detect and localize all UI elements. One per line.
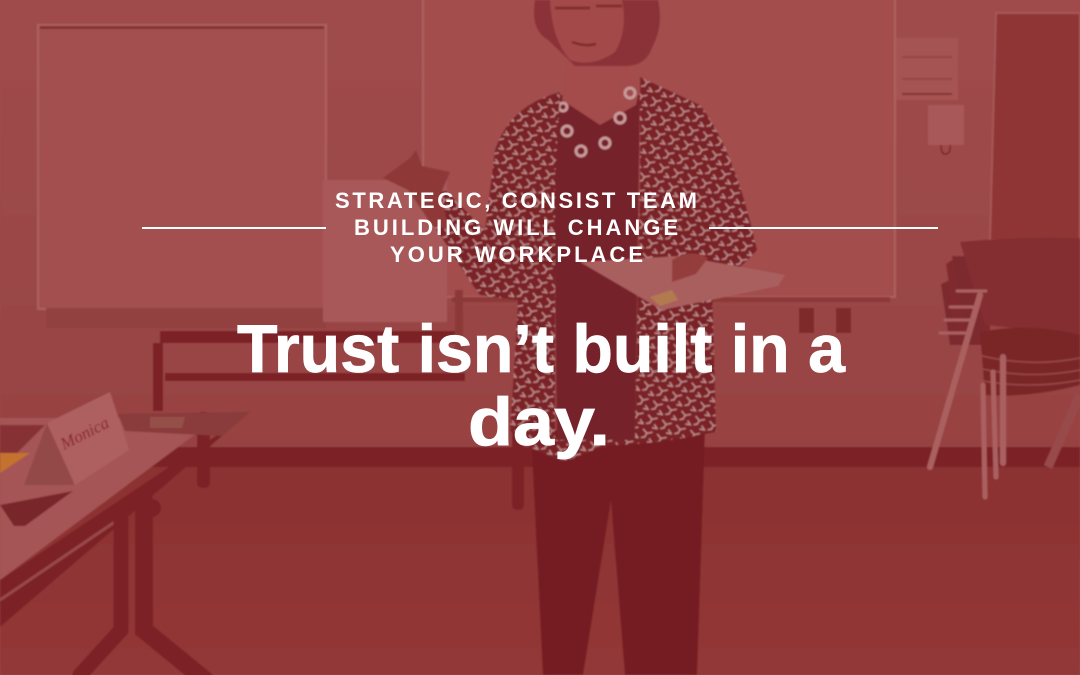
orange paper	[0, 453, 30, 473]
subtitle: YOUR WORKPLACE	[390, 242, 643, 267]
baseboard	[0, 447, 1080, 467]
wall outlets	[799, 308, 851, 333]
front table	[0, 392, 250, 675]
left whiteboard	[38, 25, 326, 328]
raised hand	[383, 150, 450, 230]
face	[550, 0, 624, 63]
wall notice	[896, 38, 958, 100]
person: presenter	[383, 0, 785, 675]
left rule	[142, 227, 326, 229]
floor	[0, 466, 1080, 675]
cardigan	[420, 77, 757, 462]
stacked chairs	[930, 238, 1080, 497]
trousers	[531, 430, 705, 675]
wall	[0, 0, 1080, 450]
title: Trust isn’t built in a	[237, 311, 846, 387]
shirt	[553, 95, 640, 440]
necklace	[559, 88, 635, 156]
rear table	[153, 290, 524, 510]
right rule	[709, 227, 938, 229]
centre whiteboard	[423, 0, 895, 302]
easel pad	[323, 180, 447, 322]
holding hand	[672, 253, 708, 282]
magazine	[118, 412, 250, 436]
table legs	[80, 500, 205, 675]
subtitle: STRATEGIC, CONSIST TEAM	[335, 188, 697, 213]
desk items	[0, 425, 45, 470]
name card: Monica	[56, 413, 112, 454]
wall box	[928, 105, 964, 154]
hair	[534, 0, 660, 66]
name card	[47, 392, 129, 485]
subtitle: BUILDING WILL CHANGE	[354, 215, 678, 240]
right dark board	[990, 13, 1080, 240]
dark book	[0, 491, 73, 526]
neck	[562, 58, 640, 125]
papers	[580, 256, 785, 310]
title: day.	[468, 384, 610, 460]
title	[237, 311, 846, 460]
name card side	[24, 423, 75, 485]
subtitle	[335, 188, 697, 267]
